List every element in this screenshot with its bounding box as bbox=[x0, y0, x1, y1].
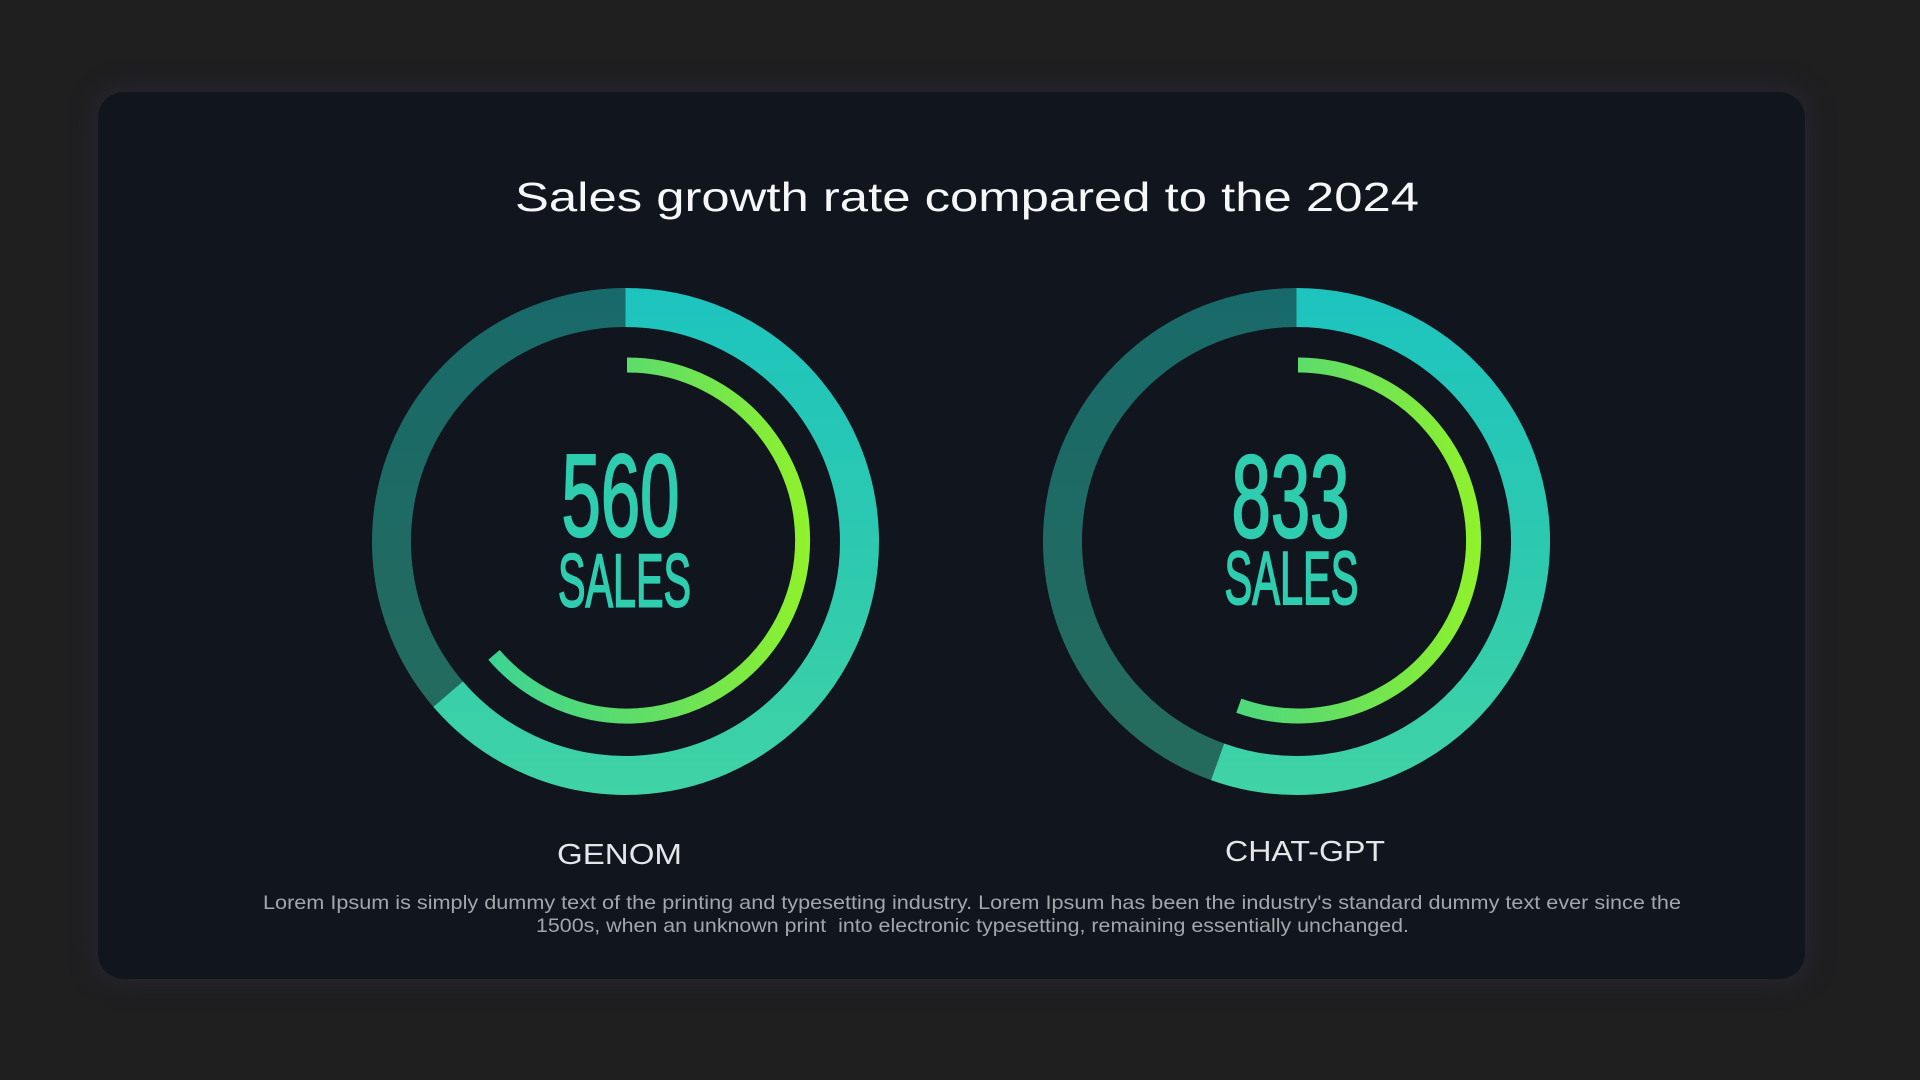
outer ring track bbox=[1062, 308, 1296, 762]
outer ring track bbox=[391, 307, 626, 694]
body text bbox=[263, 892, 1681, 937]
value: 560: 560 bbox=[562, 430, 680, 561]
title: Sales growth rate compared to the 2024 bbox=[515, 174, 1419, 220]
unit: SALES: SALES bbox=[1224, 536, 1358, 620]
inner lime arc bbox=[1239, 365, 1474, 716]
label: GENOM: GENOM bbox=[557, 839, 682, 871]
unit: SALES: SALES bbox=[558, 538, 691, 622]
chart: GENOM donut bbox=[391, 307, 859, 776]
label: CHAT-GPT: CHAT-GPT bbox=[1225, 836, 1385, 868]
inner lime arc bbox=[494, 365, 803, 716]
value: 833: 833 bbox=[1232, 431, 1350, 562]
outer ring value bbox=[1218, 308, 1530, 776]
outer ring value bbox=[448, 308, 859, 776]
chart: CHAT-GPT donut bbox=[1062, 308, 1530, 776]
panel: dark card bbox=[98, 92, 1805, 979]
body text: 1500s, when an unknown print into electronic typesetting, remaining essentially unchanged. bbox=[536, 915, 1409, 937]
body text: Lorem Ipsum is simply dummy text of the printing and typesetting industry. Lorem Ipsum has been the industry's standard dummy text ever since the bbox=[263, 892, 1681, 914]
